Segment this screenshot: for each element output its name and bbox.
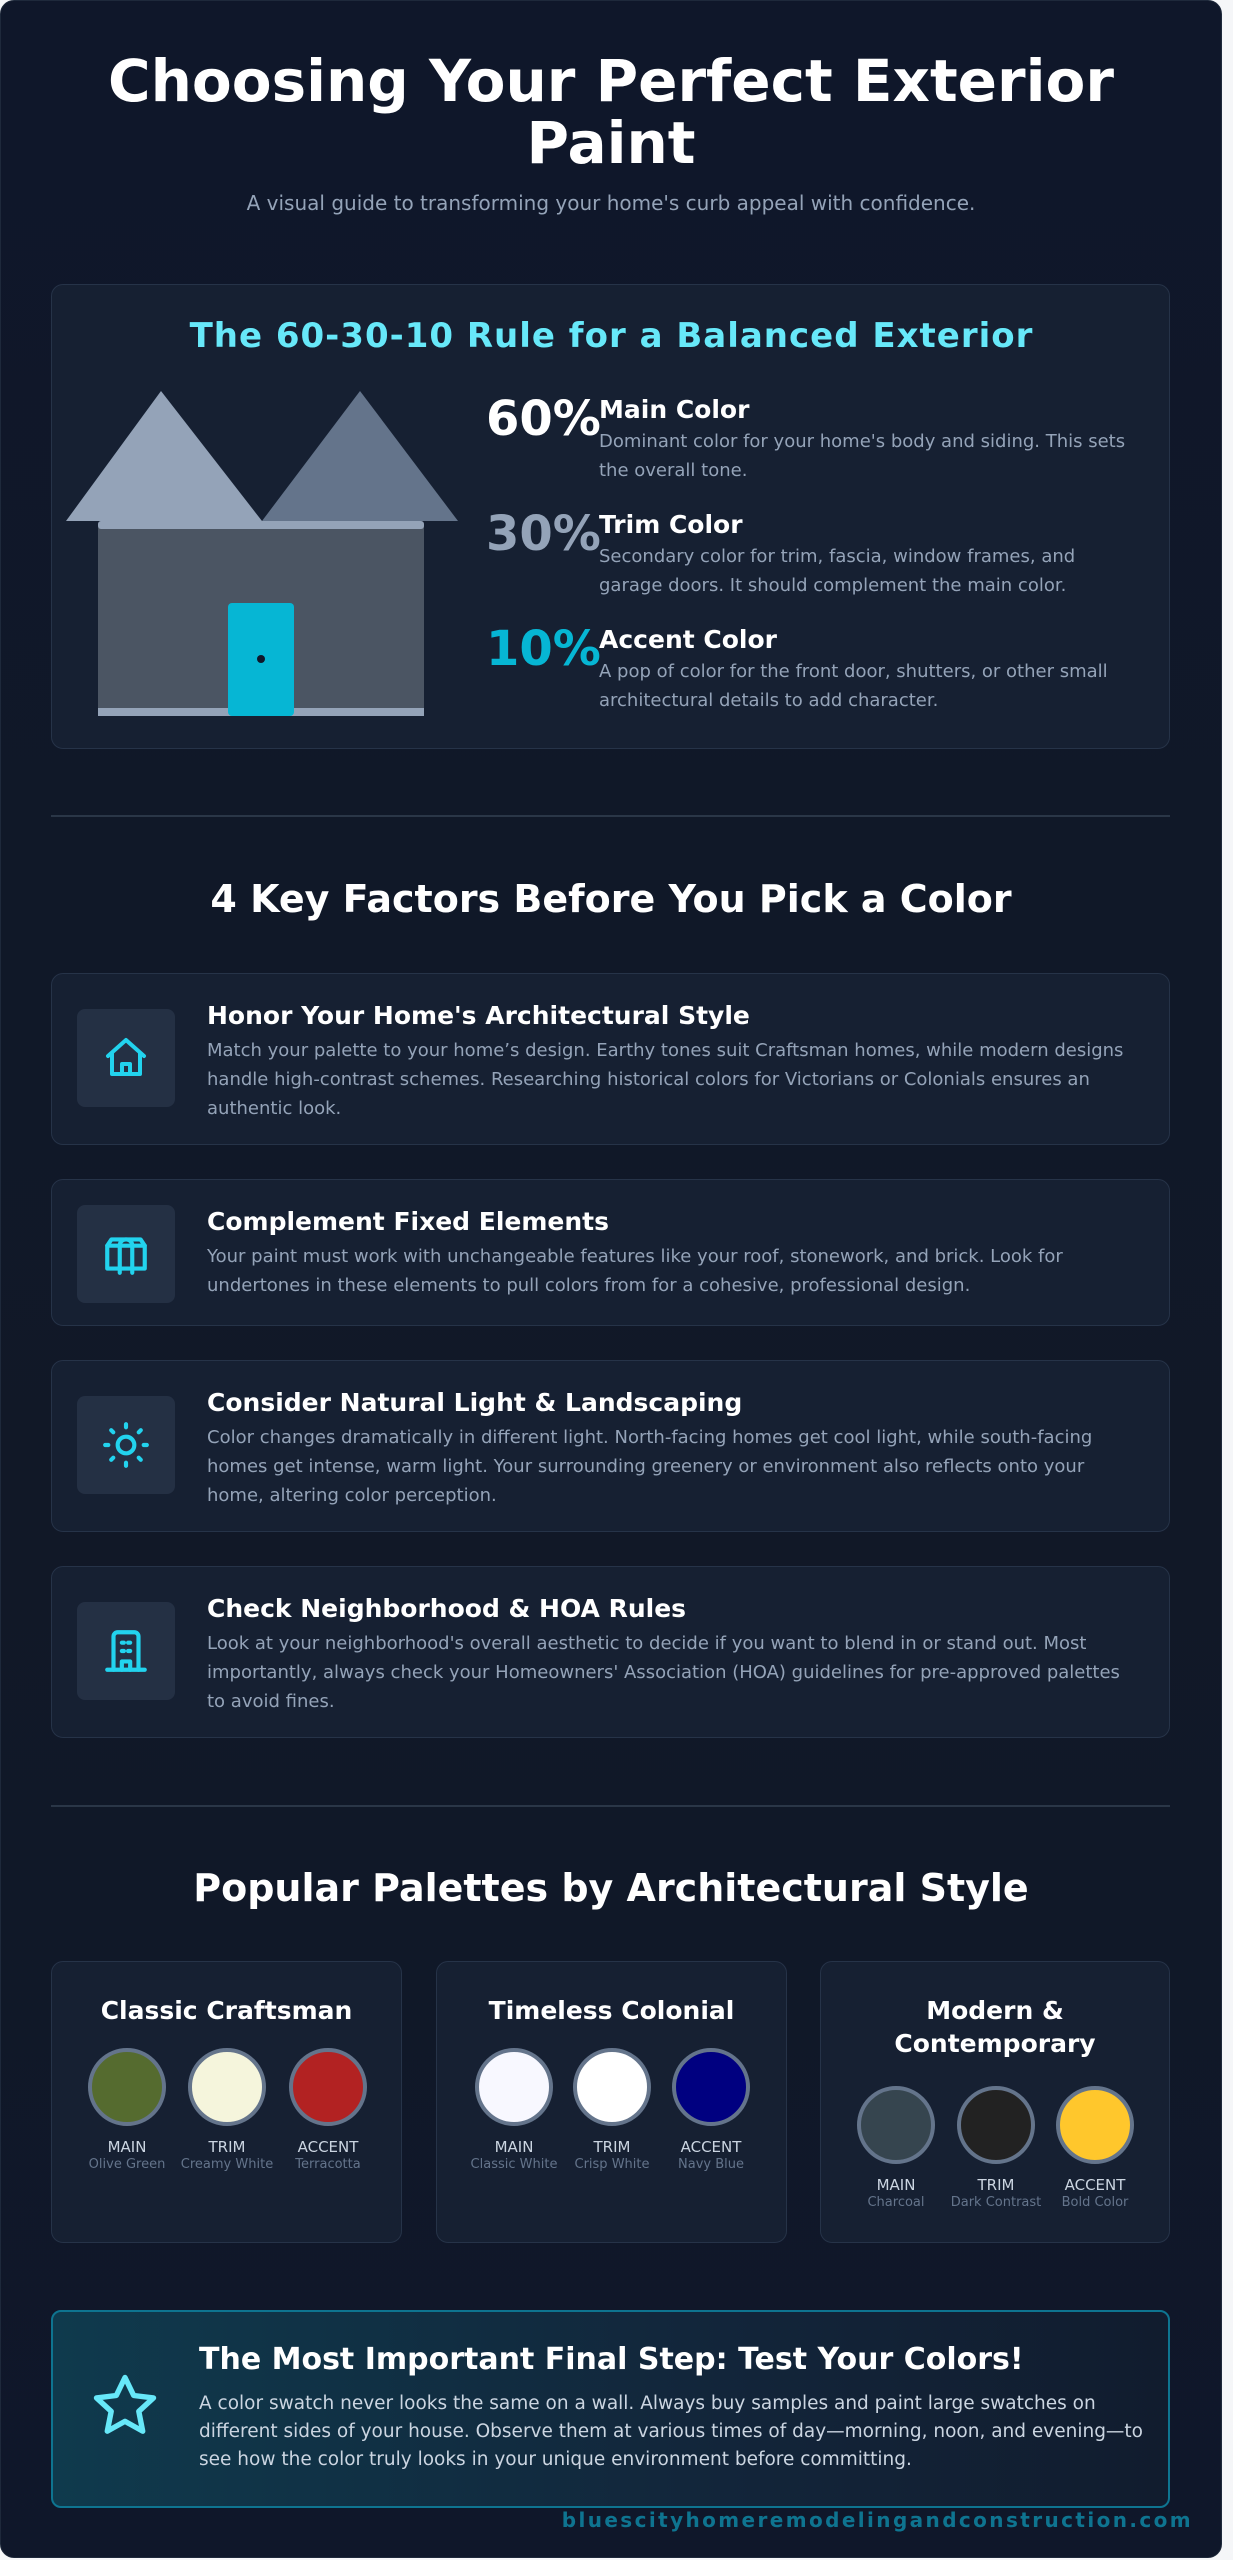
callout text: A color swatch never looks the same on a wall. Always buy samples and paint large swatches on different sides of your house. Observe them at various times of day—morning, noon, and evening—to see how the color truly looks in your unique environment before committing. (199, 2393, 1143, 2470)
palette: colonial: Timeless Colonial (489, 1996, 734, 2025)
panel: 60-30-10 rule: A pop of color for the front door, shutters, or other small architectural details to add character. (599, 661, 1108, 711)
factor: architectural style: Match your palette to your home’s design. Earthy tones suit Craftsman homes, while modern designs handle high-contrast schemes. Researching historical colors for Victorians or Colonials ensures an authentic look. (207, 1040, 1123, 1119)
panel: 60-30-10 rule: Main Color (599, 395, 749, 424)
factor: light & landscaping (51, 1360, 1170, 1532)
callout text (199, 2342, 1143, 2470)
palette: craftsman (51, 1961, 402, 2243)
factor: fixed elements: Complement Fixed Elements (207, 1207, 609, 1236)
panel: 60-30-10 rule: Accent Color (599, 625, 777, 654)
factor: fixed elements: Your paint must work with unchangeable features like your roof, stonework, and brick. Look for undertones in these elements to pull colors from for a cohesive, professional design. (207, 1246, 1063, 1296)
icon: house (77, 1009, 175, 1107)
palette: colonial: Classic White (471, 2157, 557, 2172)
heading: popular palettes: Popular Palettes by Architectural Style (193, 1866, 1029, 1910)
heading: 60-30-10: The 60-30-10 Rule for a Balanced Exterior (190, 316, 1033, 356)
palette: modern: Modern & (926, 1996, 1064, 2025)
palette: colonial: Crisp White (574, 2157, 650, 2172)
palette: craftsman: Classic Craftsman (101, 1996, 352, 2025)
palette: colonial: Navy Blue (678, 2157, 744, 2172)
palette: colonial (436, 1961, 787, 2243)
title (108, 47, 1114, 177)
palette: craftsman: TRIM (209, 2138, 245, 2156)
footer: website: bluescityhomeremodelingandconstruction.com (562, 2508, 1193, 2532)
factor: neighborhood & HOA: Check Neighborhood & HOA Rules (207, 1594, 686, 1623)
60% main: 60% (486, 391, 601, 447)
palette: craftsman: Olive Green (89, 2157, 165, 2172)
heading: 4 key factors: 4 Key Factors Before You Pick a Color (210, 877, 1012, 921)
panel: 60-30-10 rule: Secondary color for trim, fascia, window frames, and garage doors. It should complement the main color. (599, 546, 1075, 596)
icon: star (94, 2374, 156, 2434)
factor: fixed elements (51, 1179, 1170, 1326)
10% accent: 10% (486, 621, 601, 677)
palette: modern: Dark Contrast (951, 2195, 1041, 2210)
palette: colonial: ACCENT (681, 2138, 741, 2156)
subtitle: A visual guide to transforming your home's curb appeal with confidence. (247, 191, 975, 215)
panel: 60-30-10 rule: Trim Color (599, 510, 743, 539)
palette: modern: ACCENT (1065, 2176, 1125, 2194)
palette: craftsman: Creamy White (181, 2157, 273, 2172)
palette: craftsman: Terracotta (295, 2157, 361, 2172)
icon: building (77, 1602, 175, 1700)
palette: modern: Contemporary (894, 2029, 1096, 2058)
factor: architectural style: Honor Your Home's Architectural Style (207, 1001, 750, 1030)
palette: modern: Bold Color (1062, 2195, 1128, 2210)
house illustration (66, 391, 458, 716)
palette: modern: TRIM (978, 2176, 1014, 2194)
title: Choosing Your Perfect Exterior (108, 47, 1114, 115)
factor: light & landscaping: Consider Natural Light & Landscaping (207, 1388, 742, 1417)
palette: colonial: MAIN (495, 2138, 533, 2156)
title: Paint (526, 109, 696, 177)
palette: craftsman: ACCENT (298, 2138, 358, 2156)
callout text: The Most Important Final Step: Test Your Colors! (199, 2342, 1024, 2377)
callout: test your colors (51, 2310, 1170, 2508)
icon: sun (77, 1396, 175, 1494)
factor: neighborhood & HOA: Look at your neighborhood's overall aesthetic to decide if you want to blend in or stand out. Most importantly, always check your Homeowners' Association (HOA) guidelines for pre-approved palettes to avoid fines. (207, 1633, 1120, 1712)
factor: light & landscaping: Color changes dramatically in different light. North-facing homes get cool light, while south-facing homes get intense, warm light. Your surrounding greenery or environment also reflects onto your home, altering color perception. (207, 1427, 1092, 1506)
icon: package (77, 1205, 175, 1303)
palette: modern: MAIN (877, 2176, 915, 2194)
palette: modern (820, 1961, 1170, 2243)
factor: architectural style (51, 973, 1170, 1145)
panel: 60-30-10 rule (51, 284, 1170, 749)
30% trim: 30% (486, 506, 601, 562)
palette: craftsman: MAIN (108, 2138, 146, 2156)
palette: colonial: TRIM (594, 2138, 630, 2156)
panel: 60-30-10 rule: Dominant color for your home's body and siding. This sets the overall tone. (599, 431, 1125, 481)
palette: modern: Charcoal (867, 2195, 925, 2210)
factor: neighborhood & HOA (51, 1566, 1170, 1738)
